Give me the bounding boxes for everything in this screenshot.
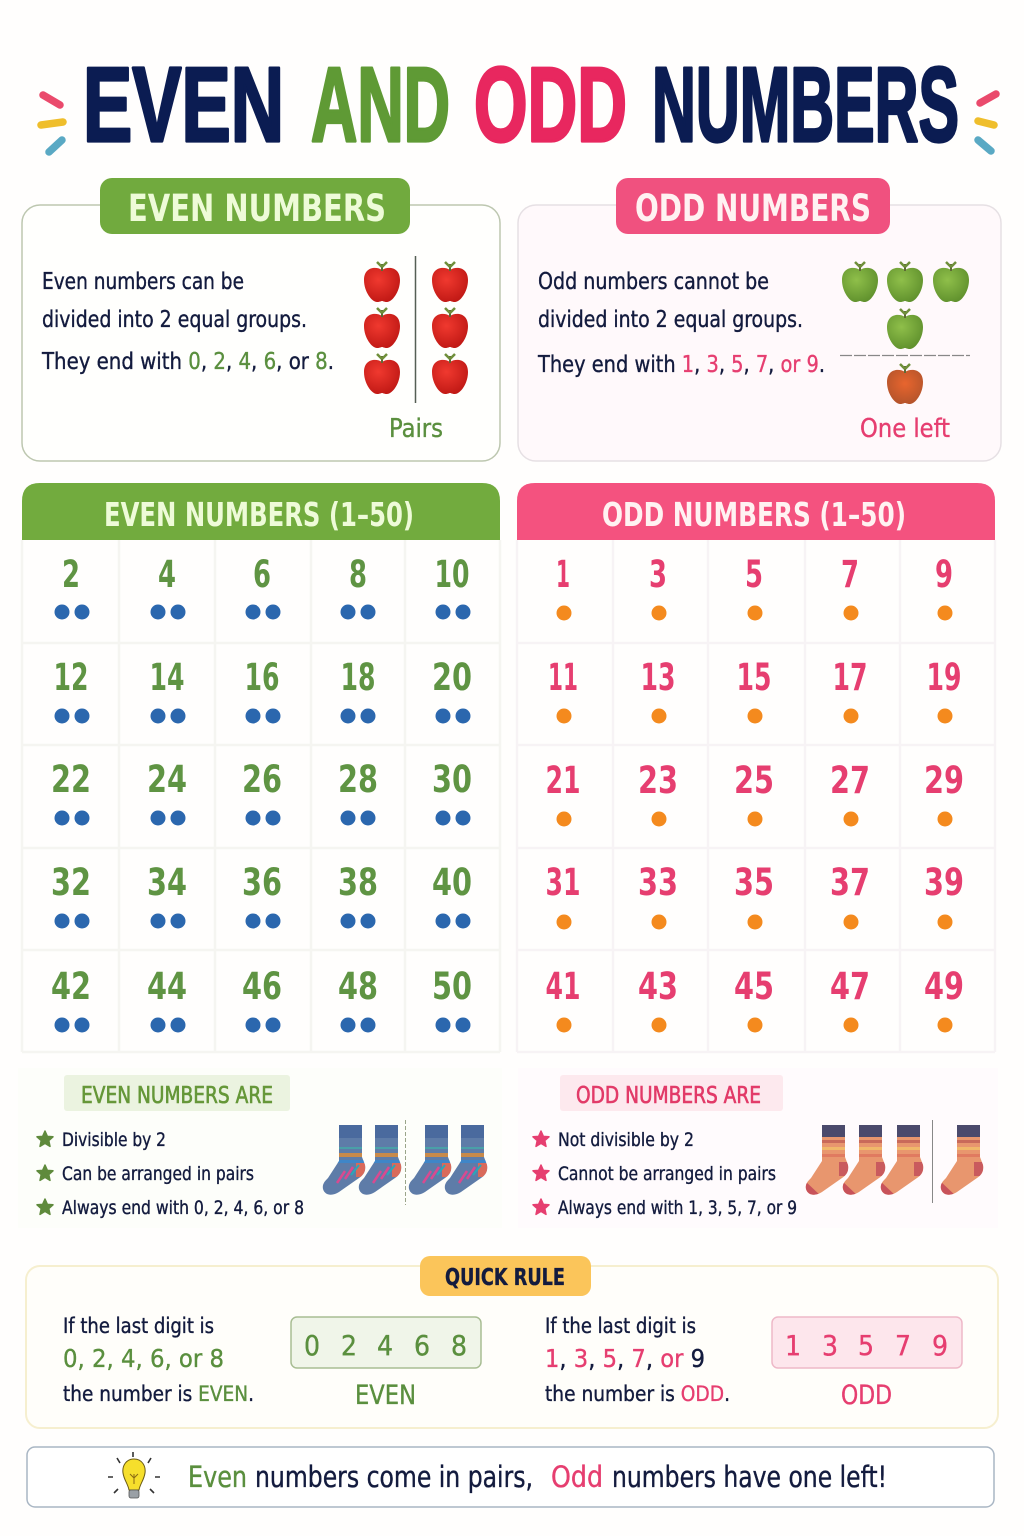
even numbers row 4: 40: [432, 861, 472, 904]
even numbers row 2: 12: [54, 656, 88, 699]
even numbers row 3: 24: [147, 758, 187, 801]
odd numbers row 5: 45: [734, 965, 774, 1008]
even numbers row 2: 18: [340, 656, 376, 699]
odd numbers row 5: 41: [546, 965, 580, 1008]
text block: even definition: Even numbers can be: [42, 269, 244, 295]
even numbers row 1: 2: [62, 553, 80, 596]
digit box: even digits: 4: [377, 1329, 393, 1362]
even numbers row 2: 16: [244, 656, 280, 699]
even numbers row 3: 28: [338, 758, 378, 801]
odd numbers row 2: 15: [736, 656, 772, 699]
text block: odd definition: Odd numbers cannot be: [538, 269, 769, 295]
title word: odd: ODD: [474, 46, 627, 164]
digit box: even digits: 0: [304, 1329, 320, 1362]
icon: light bulb: [108, 1452, 160, 1498]
text block: even rule: [63, 1314, 254, 1406]
odd numbers row 3: 29: [924, 759, 964, 802]
odd numbers row 3: 25: [734, 759, 774, 802]
icon: green apples with one left: [840, 262, 970, 404]
heading: even numbers: [100, 178, 410, 234]
odd numbers row 4: 37: [830, 861, 870, 904]
even numbers row 2: 20: [432, 656, 472, 699]
digit box: even digits: 2: [341, 1329, 357, 1362]
list: odd properties: Always end with 1, 3, 5, 7, or 9: [558, 1197, 797, 1219]
odd numbers row 4: 35: [734, 861, 774, 904]
text: even come in pairs: [188, 1460, 887, 1494]
icon: left sparks: [41, 95, 63, 152]
odd numbers row 3: 23: [638, 759, 678, 802]
text block: odd rule: If the last digit is: [545, 1314, 696, 1338]
digit box: even digits: 6: [414, 1329, 430, 1362]
odd numbers row 1: 7: [841, 553, 859, 596]
even numbers row 4: 32: [51, 861, 91, 904]
even numbers row 3: 26: [242, 758, 282, 801]
text: even come in pairs: numbers come in pairs,: [255, 1460, 533, 1494]
even numbers row 4: [51, 861, 472, 928]
even numbers row 5: 44: [147, 965, 187, 1008]
even numbers row 5: 46: [242, 965, 282, 1008]
text block: even definition: [41, 269, 334, 375]
text: even come in pairs: numbers have one left!: [612, 1460, 887, 1494]
even numbers row 5: 50: [432, 965, 472, 1008]
heading: odd numbers: ODD NUMBERS: [635, 187, 871, 230]
digit box: odd digits: 1: [785, 1329, 801, 1362]
panel: quick rule: [26, 1256, 998, 1428]
title word: even: EVEN: [83, 46, 284, 164]
text block: odd definition: divided into 2 equal groups.: [538, 307, 803, 333]
digit box: odd digits: 9: [932, 1329, 948, 1362]
odd numbers row 1: 9: [935, 553, 953, 596]
odd numbers row 1: [556, 553, 953, 620]
text: even come in pairs: Even: [188, 1460, 247, 1494]
odd numbers row 2: 13: [640, 656, 676, 699]
title: [83, 46, 959, 164]
even numbers row 1: 8: [349, 553, 367, 596]
list: odd properties: Cannot be arranged in pairs: [558, 1163, 776, 1185]
odd numbers row 4: 39: [924, 861, 964, 904]
odd numbers row 4: 33: [638, 861, 678, 904]
odd numbers row 1: 3: [649, 553, 667, 596]
list: even properties: Always end with 0, 2, 4, 6, or 8: [62, 1197, 304, 1219]
label: even: EVEN: [355, 1380, 416, 1411]
panel: even numbers definition: [22, 178, 500, 461]
even numbers row 2: [54, 656, 472, 724]
label: pairs: Pairs: [389, 414, 443, 444]
even numbers row 1: 6: [253, 553, 271, 596]
text block: odd definition: [537, 269, 825, 378]
odd numbers row 4: 31: [546, 861, 580, 904]
heading: even numbers 1-50: EVEN NUMBERS (1–50): [104, 495, 414, 534]
text block: odd rule: 1, 3, 5, 7, or 9: [545, 1344, 705, 1373]
text block: even rule: If the last digit is: [63, 1314, 214, 1338]
heading: odd numbers 1-50: [517, 483, 995, 540]
panel: even numbers grid: [22, 483, 500, 1052]
even numbers row 1: 4: [158, 553, 176, 596]
text block: even rule: 0, 2, 4, 6, or 8: [63, 1344, 224, 1373]
even numbers row 3: [51, 758, 472, 826]
odd numbers row 1: 5: [745, 553, 763, 596]
text block: odd rule: the number is ODD.: [545, 1382, 730, 1406]
list: even properties: [37, 1129, 304, 1219]
even numbers row 1: [54, 553, 470, 620]
odd numbers row 2: 11: [548, 656, 578, 699]
label: one left: One left: [860, 414, 950, 444]
text block: even definition: They end with 0, 2, 4, 6, or 8.: [41, 349, 334, 375]
text: even come in pairs: Odd: [551, 1460, 603, 1494]
even numbers row 3: 30: [432, 758, 472, 801]
heading: quick rule: [420, 1256, 591, 1296]
list: even properties: Divisible by 2: [62, 1129, 166, 1151]
even numbers row 2: 14: [150, 656, 184, 699]
heading: odd numbers: [616, 178, 890, 234]
odd numbers row 3: 21: [546, 759, 580, 802]
list: even properties: Can be arranged in pairs: [62, 1163, 254, 1185]
even numbers row 4: 38: [338, 861, 378, 904]
icon: six red apples in pairs: [364, 256, 468, 403]
odd numbers row 5: [546, 965, 964, 1032]
odd numbers row 2: [548, 656, 962, 724]
even numbers row 4: 34: [147, 861, 187, 904]
heading: even numbers are: EVEN NUMBERS ARE: [81, 1083, 273, 1109]
odd numbers row 2: 17: [832, 656, 868, 699]
digit box: odd digits: [772, 1317, 962, 1368]
heading: quick rule: QUICK RULE: [445, 1265, 565, 1291]
even numbers row 3: 22: [51, 758, 91, 801]
heading: odd numbers are: [560, 1075, 783, 1111]
text block: even rule: the number is EVEN.: [63, 1382, 254, 1406]
panel: odd properties: [518, 1068, 998, 1228]
heading: even numbers: EVEN NUMBERS: [128, 187, 386, 230]
panel: odd numbers definition: [518, 178, 1001, 461]
even numbers row 5: [51, 965, 472, 1032]
icon: even socks: [323, 1120, 490, 1205]
heading: even numbers 1-50: [22, 483, 500, 540]
label: odd: ODD: [841, 1380, 892, 1411]
heading: even numbers are: [64, 1075, 290, 1111]
odd numbers row 3: [546, 759, 964, 826]
odd numbers row 3: 27: [830, 759, 870, 802]
icon: odd socks: [803, 1120, 986, 1203]
text block: even definition: divided into 2 equal groups.: [42, 307, 307, 333]
odd numbers row 4: [546, 861, 964, 930]
list: odd properties: Not divisible by 2: [558, 1129, 694, 1151]
digit box: even digits: [291, 1317, 481, 1368]
panel: even properties: [18, 1068, 502, 1228]
digit box: odd digits: 3: [822, 1329, 838, 1362]
even numbers row 5: 48: [338, 965, 378, 1008]
odd numbers row 5: 47: [830, 965, 870, 1008]
odd numbers row 5: 49: [924, 965, 964, 1008]
text block: odd definition: They end with 1, 3, 5, 7, or 9.: [537, 352, 825, 378]
odd numbers row 2: 19: [926, 656, 962, 699]
panel: odd numbers grid: [517, 483, 995, 1052]
heading: odd numbers 1-50: ODD NUMBERS (1–50): [602, 495, 906, 534]
even numbers row 4: 36: [242, 861, 282, 904]
title word: and: AND: [311, 46, 450, 164]
odd numbers row 1: 1: [556, 553, 570, 596]
digit box: even digits: 8: [451, 1329, 467, 1362]
even numbers row 1: 10: [434, 553, 470, 596]
even numbers row 5: 42: [51, 965, 91, 1008]
panel: summary banner: [27, 1447, 994, 1507]
icon: right sparks: [978, 94, 996, 151]
digit box: odd digits: 5: [858, 1329, 874, 1362]
odd numbers row 5: 43: [638, 965, 678, 1008]
digit box: odd digits: 7: [895, 1329, 911, 1362]
text block: odd rule: [545, 1314, 730, 1406]
list: odd properties: [533, 1129, 797, 1219]
heading: odd numbers are: ODD NUMBERS ARE: [576, 1083, 761, 1109]
